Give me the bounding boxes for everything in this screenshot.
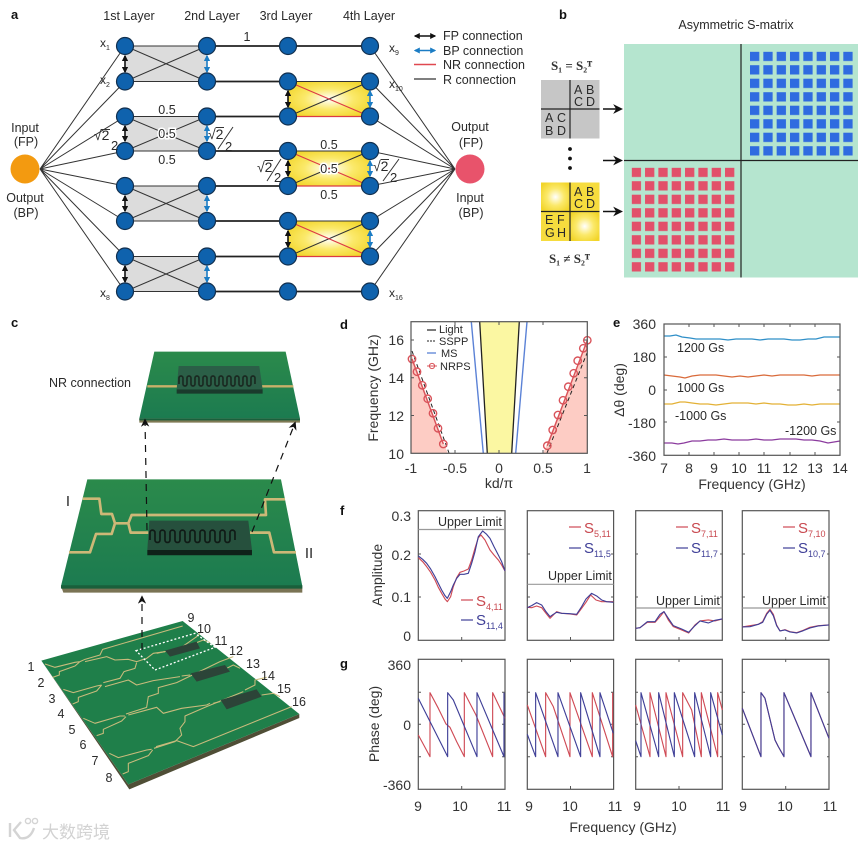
NRPS markers — [408, 337, 591, 449]
port index labels — [100, 36, 403, 302]
phase chart 1 — [418, 659, 505, 789]
ellipsis dots — [568, 147, 572, 170]
layer headings: 2nd Layer — [184, 9, 240, 23]
horizontal links — [207, 46, 370, 292]
x tick labels: 9 — [525, 798, 533, 814]
x tick labels: 10 — [777, 798, 793, 814]
weight labels: 2 — [111, 138, 118, 153]
axis tick labels: 10 — [731, 460, 747, 476]
full network board — [41, 621, 299, 789]
non-reciprocal sub-matrix: B — [586, 185, 594, 199]
weight labels: √2 — [373, 158, 389, 174]
reciprocal sub-matrix: B — [545, 124, 553, 138]
panel letter d: d — [340, 317, 348, 332]
port numbers: 2 — [38, 676, 45, 690]
yellow non-reciprocal blocks — [288, 82, 370, 256]
reciprocal sub-matrix: C — [557, 111, 566, 125]
port numbers: 10 — [197, 622, 211, 636]
amplitude chart 4: 10,7 — [808, 549, 826, 559]
network nodes — [116, 38, 378, 300]
x tick labels: 9 — [633, 798, 641, 814]
coupler unit board — [61, 479, 302, 593]
layer headings: 3rd Layer — [260, 9, 312, 23]
y tick labels: 0 — [403, 628, 411, 644]
port labels: Output — [6, 191, 44, 205]
axis tick labels: 0 — [648, 382, 656, 398]
NR connection label: NR connection — [49, 376, 131, 390]
panel c: device renderings — [10, 315, 313, 842]
port numbers: 16 — [292, 695, 306, 709]
watermark — [10, 818, 110, 842]
non-reciprocal sub-matrix: A — [574, 185, 583, 199]
x tick labels: 9 — [414, 798, 422, 814]
panel f: amplitude charts — [340, 503, 829, 644]
x tick labels: 9 — [739, 798, 747, 814]
axis tick labels: 9 — [710, 460, 718, 476]
non-reciprocal sub-matrix: H — [557, 226, 566, 240]
panel letter b: b — [559, 7, 567, 22]
phase chart 2 — [527, 659, 614, 789]
amplitude chart 1: S — [476, 612, 486, 629]
port index labels: 1 — [106, 45, 110, 52]
amplitude chart 3: S — [691, 520, 701, 537]
axis tick labels: -1 — [405, 460, 417, 476]
panel letter e: e — [613, 315, 620, 330]
amplitude chart 2: 5,11 — [594, 529, 611, 539]
amplitude chart 4 — [742, 511, 829, 640]
legend: BP connection — [443, 44, 523, 58]
equality labels: S₁ = S₂ᵀ — [551, 58, 593, 73]
NR connection board — [139, 352, 300, 423]
port labels: Input — [456, 191, 484, 205]
port index labels: x — [389, 77, 395, 91]
x tick labels: 11 — [497, 798, 511, 814]
legend: R connection — [443, 73, 516, 87]
weight labels: √2 — [257, 159, 273, 175]
port numbers: 7 — [92, 754, 99, 768]
y tick labels — [383, 657, 411, 793]
weight labels: 0.5 — [158, 127, 176, 141]
y tick labels: 0.2 — [392, 547, 411, 563]
axis tick labels: -0.5 — [443, 460, 467, 476]
panel letter g: g — [340, 656, 348, 671]
ports I and II labels — [66, 493, 313, 562]
weight labels: 2 — [390, 170, 397, 185]
amplitude chart 1: 4,11 — [486, 602, 503, 612]
x tick labels: 11 — [608, 798, 622, 814]
reciprocal sub-matrix: D — [586, 95, 595, 109]
weight labels — [94, 30, 399, 202]
panel b: asymmetric S-matrix — [541, 7, 858, 278]
non-reciprocal sub-matrix: E — [545, 213, 553, 227]
amplitude chart 2 — [527, 511, 614, 640]
port index labels: x — [389, 286, 395, 300]
axis tick labels: 180 — [633, 349, 656, 365]
port index labels: x — [389, 41, 395, 55]
axis tick labels: 16 — [388, 332, 404, 348]
x tick labels: 10 — [562, 798, 578, 814]
large S-matrix — [624, 44, 858, 278]
curve labels: 1200 Gs — [677, 341, 724, 355]
layer headings: 4th Layer — [343, 9, 395, 23]
axis tick labels: 1 — [583, 460, 591, 476]
reciprocal sub-matrix: A — [574, 83, 583, 97]
non-reciprocal sub-matrix: F — [557, 213, 565, 227]
vertical FP and BP arrows — [125, 56, 370, 282]
axis tick labels: 13 — [807, 460, 823, 476]
reciprocal sub-matrix: A — [545, 111, 554, 125]
axis tick labels: 8 — [685, 460, 693, 476]
weight labels: 0.5 — [320, 138, 338, 152]
amplitude chart 3: 7,11 — [701, 529, 718, 539]
y tick labels: -360 — [383, 777, 411, 793]
amplitude chart 1: 11,4 — [486, 621, 503, 631]
x tick labels: 11 — [823, 798, 837, 814]
port index labels: x — [100, 36, 106, 50]
reciprocal sub-matrix: D — [557, 124, 566, 138]
y tick labels: 0.3 — [392, 508, 411, 524]
watermark: 大数跨境 — [42, 823, 110, 842]
y tick labels: 360 — [388, 657, 411, 673]
amplitude chart 4: Upper Limit — [762, 594, 826, 608]
reciprocal sub-matrix — [541, 80, 600, 138]
x tick labels — [414, 798, 837, 814]
curve labels: -1000 Gs — [675, 409, 726, 423]
legend — [414, 29, 525, 87]
yellow light cone — [480, 322, 519, 453]
port labels: Input — [11, 121, 39, 135]
axes frame — [411, 322, 587, 453]
port numbers: 9 — [188, 611, 195, 625]
weight labels: √2 — [94, 127, 110, 143]
panel d: dispersion chart — [340, 317, 591, 491]
amplitude chart 2: 11,5 — [594, 549, 611, 559]
equality labels: S₁ ≠ S₂ᵀ — [549, 251, 591, 266]
legend: NR connection — [443, 58, 525, 72]
y tick labels: 0.1 — [392, 589, 411, 605]
amplitude chart 1: Upper Limit — [438, 515, 502, 529]
port index labels: x — [100, 286, 106, 300]
curve labels — [675, 341, 836, 438]
layer headings — [103, 9, 395, 23]
layer headings: 1st Layer — [103, 9, 155, 23]
port numbers — [28, 611, 306, 785]
port numbers: 4 — [58, 707, 65, 721]
legend: MS — [441, 348, 458, 360]
port index labels: 8 — [106, 295, 110, 302]
non-reciprocal sub-matrix: D — [586, 197, 595, 211]
port labels — [6, 120, 489, 220]
port index labels: 10 — [395, 86, 403, 93]
port numbers: 3 — [49, 692, 56, 706]
port labels: (BP) — [458, 206, 484, 220]
axis tick labels: 12 — [782, 460, 798, 476]
port index labels: 16 — [395, 295, 403, 302]
legend: FP connection — [443, 29, 523, 43]
amplitude chart 1 — [418, 511, 505, 640]
port numbers: 12 — [229, 644, 243, 658]
pink NRPS regions — [411, 340, 587, 453]
y axis title: Phase (deg) — [366, 686, 382, 762]
reciprocal sub-matrix: B — [586, 83, 594, 97]
x axis title: Frequency (GHz) — [569, 819, 677, 835]
ports I and II labels: II — [305, 545, 313, 562]
amplitude chart 1: S — [476, 593, 486, 610]
port numbers: 5 — [69, 723, 76, 737]
panel g: phase charts — [340, 656, 837, 835]
port index labels: x — [100, 73, 106, 87]
non-reciprocal sub-matrix: C — [574, 197, 583, 211]
fan-out and fan-in lines — [40, 46, 455, 292]
panel e: phase difference chart — [611, 315, 848, 492]
weight labels: 0.5 — [320, 188, 338, 202]
y axis title: Δθ (deg) — [611, 363, 627, 417]
dashed zoom arrows — [142, 420, 295, 650]
amplitude chart 4: 7,10 — [808, 529, 826, 539]
port numbers: 15 — [277, 682, 291, 696]
weight labels: 2 — [225, 139, 232, 154]
axes frame — [664, 324, 840, 455]
legend: Light — [439, 324, 463, 336]
port labels: (BP) — [14, 206, 38, 220]
amplitude chart 3: S — [691, 540, 701, 557]
port numbers: 14 — [261, 669, 275, 683]
panel letter c: c — [11, 315, 18, 330]
input port circle — [10, 154, 40, 184]
x axis title: kd/π — [485, 475, 514, 491]
axis tick labels — [388, 332, 591, 476]
axis tick labels: 0.5 — [533, 460, 553, 476]
curve labels: -1200 Gs — [785, 424, 836, 438]
x tick labels: 10 — [452, 798, 468, 814]
y tick labels: 0 — [403, 717, 411, 733]
port index labels: 9 — [395, 50, 399, 57]
x axis title: Frequency (GHz) — [698, 476, 806, 492]
phase curves — [664, 335, 840, 444]
port numbers: 6 — [80, 738, 87, 752]
amplitude chart 2: S — [584, 520, 594, 537]
output port circle — [456, 154, 484, 184]
axis tick labels — [628, 316, 848, 476]
axis tick labels: 10 — [388, 446, 404, 462]
amplitude chart 2: S — [584, 540, 594, 557]
weight labels: 1 — [244, 30, 251, 44]
axis tick labels: 7 — [660, 460, 668, 476]
port numbers: 11 — [215, 634, 228, 648]
legend: SSPP — [439, 336, 468, 348]
non-reciprocal sub-matrix — [541, 182, 600, 241]
weight labels: √2 — [208, 126, 224, 142]
axis tick labels: 11 — [757, 460, 771, 476]
port numbers: 13 — [246, 657, 260, 671]
non-reciprocal sub-matrix: G — [545, 226, 555, 240]
curve labels: 1000 Gs — [677, 381, 724, 395]
axis tick labels: -360 — [628, 448, 656, 464]
weight labels: 0.5 — [320, 162, 338, 176]
weight labels: 0.5 — [158, 153, 176, 167]
amplitude chart 3 — [636, 511, 722, 640]
weight labels: 2 — [274, 170, 281, 185]
phase chart 3 — [636, 659, 722, 789]
amplitude chart 3: Upper Limit — [656, 594, 720, 608]
phase chart 4 — [742, 659, 829, 789]
legend — [427, 324, 471, 373]
port numbers: 1 — [28, 660, 35, 674]
axis tick labels: -180 — [628, 415, 656, 431]
y axis title: Frequency (GHz) — [365, 334, 381, 442]
axis tick labels: 12 — [388, 408, 404, 424]
axis tick labels: 360 — [633, 316, 656, 332]
legend: NRPS — [440, 361, 471, 373]
amplitude chart 4: S — [798, 520, 808, 537]
ports I and II labels: I — [66, 493, 70, 510]
grey reciprocal blocks — [125, 46, 207, 292]
port numbers: 8 — [106, 771, 113, 785]
port labels: (FP) — [14, 135, 38, 149]
matrix title: Asymmetric S-matrix — [678, 18, 794, 32]
dispersion lines — [412, 322, 587, 453]
axis tick labels: 14 — [832, 460, 848, 476]
axis tick labels: 0 — [495, 460, 503, 476]
axis tick labels: 14 — [388, 370, 404, 386]
panel letter f: f — [340, 503, 345, 518]
arrows to matrix — [603, 109, 621, 212]
amplitude chart 3: 11,7 — [701, 549, 718, 559]
reciprocal sub-matrix: C — [574, 95, 583, 109]
port index labels: 2 — [106, 82, 110, 89]
panel letter a: a — [11, 7, 19, 22]
y axis title: Amplitude — [369, 544, 385, 606]
amplitude chart 4: S — [798, 540, 808, 557]
amplitude chart 2: Upper Limit — [548, 569, 612, 583]
port labels: (FP) — [459, 136, 483, 150]
x tick labels: 10 — [671, 798, 687, 814]
weight labels: 0.5 — [158, 103, 176, 117]
equality labels — [549, 58, 593, 266]
panel a: network diagram — [6, 7, 525, 302]
x tick labels: 11 — [716, 798, 730, 814]
port labels: Output — [451, 120, 489, 134]
y tick labels — [392, 508, 411, 644]
